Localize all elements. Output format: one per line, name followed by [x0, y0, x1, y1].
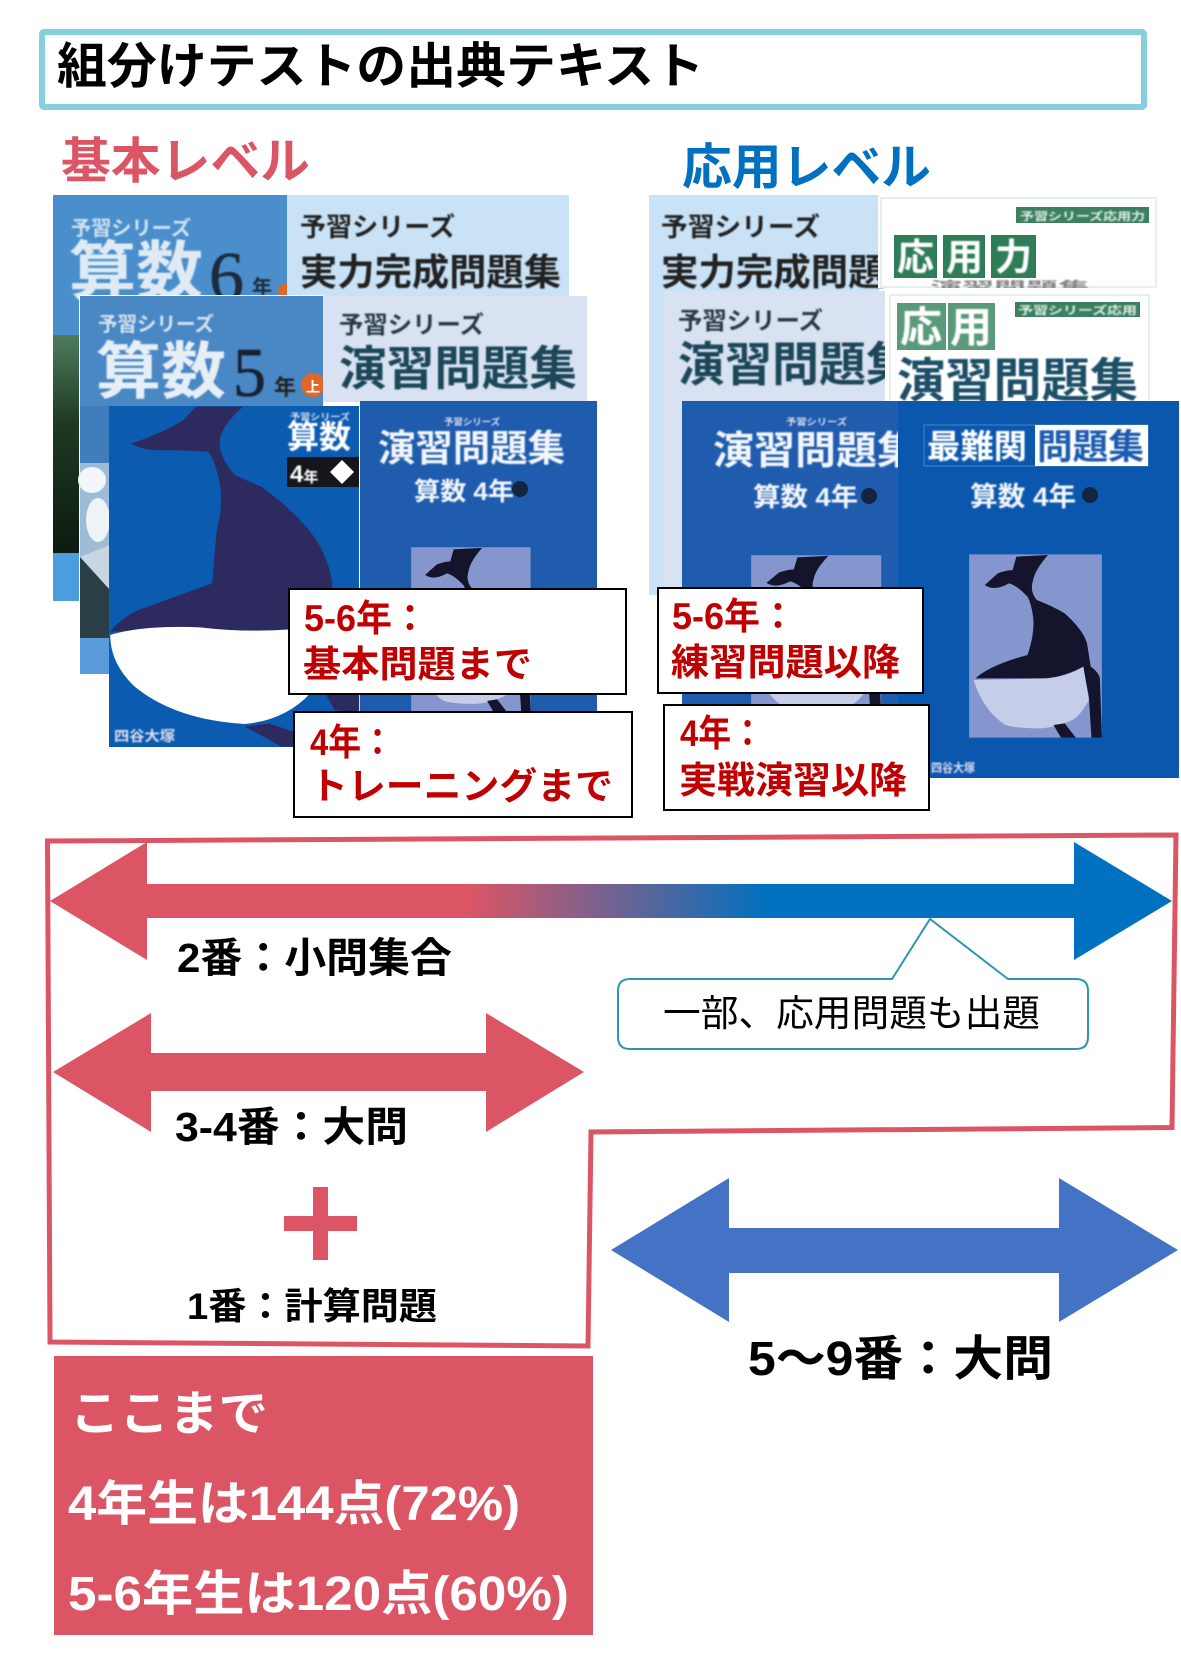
icon: plus sign [284, 1187, 357, 1260]
panel: score summary: 5-6年生は120点(60%) [68, 1568, 569, 1621]
title box: 組分けテストの出典テキスト [57, 40, 704, 94]
panel: score summary: 4年生は144点(72%) [68, 1478, 520, 1531]
book: math grade 5 [78, 295, 325, 674]
book: exercise problems grade 4: 算数 4年 [753, 482, 858, 512]
book: math grade 4 whale cover: 四谷大塚 [114, 728, 175, 744]
panel: score summary: ここまで [70, 1388, 268, 1441]
workbook: applied exercise green cover: 演習問題集 [897, 354, 1138, 407]
panel: score summary [54, 1356, 593, 1635]
workbook header: practical completion problems [287, 195, 569, 296]
book: exercise problems grade 4: 演習問題集 [713, 430, 918, 473]
book: math grade 4 whale cover: 算数 [287, 419, 351, 455]
workbook header: practical completion problems: 実力完成問題集 [661, 252, 923, 293]
book: math grade 6: 算数 [69, 236, 203, 308]
callout: grade 4 actual exercises onward: 実戦演習以降 [679, 760, 907, 801]
workbook: exercise problems light cover: 演習問題集 [678, 338, 913, 391]
workbook: applied exercise green cover: 応 [900, 304, 942, 351]
book: exercise problems grade 4 [360, 401, 597, 712]
panel: outline around basic range [48, 835, 1176, 1346]
callout: some applied problems [618, 919, 1088, 1049]
label: questions 5-9: 5～9番：大問 [748, 1333, 1053, 1386]
heading: applied level: 応用レベル [682, 141, 931, 195]
panel: basic level book covers [53, 195, 597, 747]
callout: grades 5-6 practice problems onward [658, 588, 923, 693]
workbook: applied exercise green cover [885, 288, 1162, 407]
book: hardest problems grade 4: 最難関 [927, 428, 1027, 465]
workbook: applied exercise green cover: 用 [950, 304, 992, 351]
workbook: applied power green cover: 予習シリーズ応用力 [1020, 209, 1145, 223]
book: hardest problems grade 4 [898, 401, 1179, 778]
callout: grade 4 up to training: 4年： [310, 722, 394, 763]
book: math grade 6 [53, 195, 296, 601]
panel: applied level book covers [649, 195, 1179, 778]
book: math grade 4 whale cover: 4年 [290, 461, 318, 488]
callout: grade 4 actual exercises onward [664, 705, 929, 810]
book: hardest problems grade 4: 四谷大塚 [931, 760, 975, 775]
workbook header: exercise problems: 予習シリーズ [339, 311, 484, 339]
book: math grade 4 whale cover [109, 406, 359, 747]
workbook header: practical completion problems: 実力完成問題集 [300, 252, 561, 293]
workbook: applied exercise green cover: 予習シリーズ応用 [1018, 303, 1137, 317]
workbook header: exercise problems [323, 296, 587, 402]
book: math grade 4 whale cover: 予習シリーズ [290, 411, 350, 422]
book: math grade 5: 予習シリーズ [98, 312, 214, 336]
book: exercise problems grade 4: 予習シリーズ [786, 416, 847, 427]
book: math grade 5: 上 [306, 379, 320, 395]
workbook: applied power green cover: 力 [995, 237, 1032, 278]
callout: grades 5-6 up to basic problems: 基本問題まで [303, 644, 532, 685]
book: exercise problems grade 4: 演習問題集 [378, 428, 565, 469]
book: exercise problems grade 4: 算数 4年 [414, 478, 514, 506]
arrow: questions 3-4 double arrow [53, 1013, 584, 1132]
book: math grade 5: 年 [274, 375, 296, 400]
arrow: question 2 gradient double arrow [50, 842, 1172, 960]
workbook header: practical completion problems: 予習シリーズ [300, 212, 455, 242]
workbook header: practical completion problems: 予習シリーズ [661, 212, 820, 242]
book: hardest problems grade 4: 問題集 [1037, 428, 1144, 467]
book: exercise problems grade 4: 予習シリーズ [444, 416, 500, 427]
callout: grade 4 up to training: トレーニングまで [310, 766, 613, 807]
book: exercise problems grade 4 [682, 401, 918, 720]
heading: basic level: 基本レベル [61, 135, 310, 189]
book: math grade 5: 5 [233, 335, 266, 412]
callout: grades 5-6 up to basic problems [289, 589, 626, 694]
callout: some applied problems: 一部、応用問題も出題 [663, 993, 1040, 1034]
book: hardest problems grade 4: 算数 4年 [970, 482, 1076, 512]
book: math grade 6: 6 [209, 239, 244, 316]
callout: grades 5-6 practice problems onward: 練習問題以降 [671, 642, 900, 683]
callout: grades 5-6 practice problems onward: 5-6年： [672, 596, 796, 637]
arrow: questions 5-9 double arrow [611, 1178, 1178, 1322]
label: question 2: 2番：小問集合 [177, 935, 452, 981]
book: math grade 6: 予習シリーズ [71, 216, 191, 240]
book: math grade 6: 年 [252, 276, 272, 299]
callout: grade 4 up to training [294, 712, 632, 817]
label: question 1: 1番：計算問題 [187, 1286, 437, 1327]
label: questions 3-4: 3-4番：大問 [175, 1104, 408, 1150]
workbook header: practical completion problems [649, 195, 923, 595]
workbook: applied power green cover: 演習問題集 [930, 279, 1090, 295]
workbook: exercise problems light cover [664, 291, 913, 595]
workbook: applied power green cover [878, 196, 1162, 295]
workbook: applied power green cover: 応 [897, 237, 934, 278]
workbook: applied power green cover: 用 [946, 237, 983, 278]
callout: grades 5-6 up to basic problems: 5-6年： [304, 598, 428, 639]
book: math grade 5: 算数 [96, 338, 226, 407]
callout: grade 4 actual exercises onward: 4年： [680, 713, 764, 754]
workbook: exercise problems light cover: 予習シリーズ [678, 307, 823, 335]
workbook header: exercise problems: 演習問題集 [339, 342, 577, 395]
title box [42, 32, 1144, 107]
